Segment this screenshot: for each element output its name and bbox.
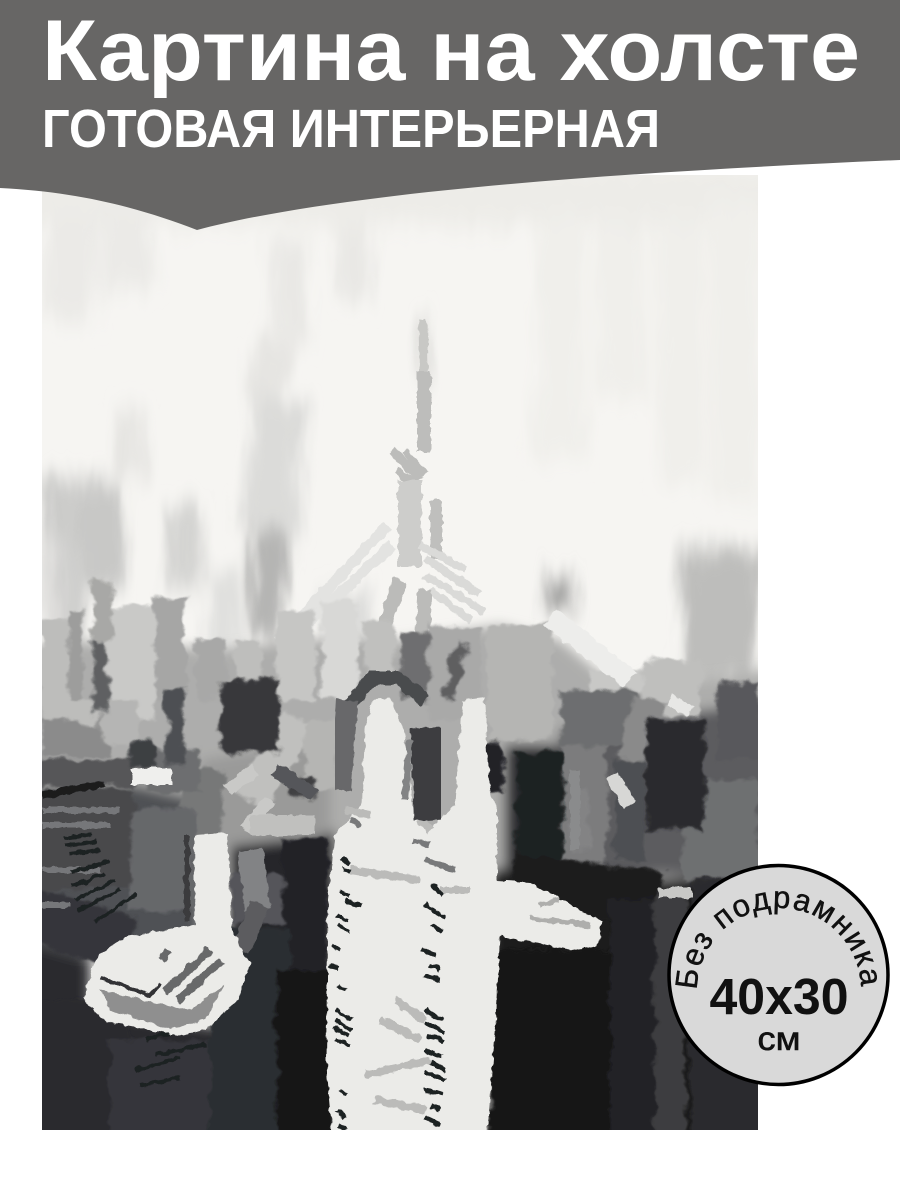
painting: hazy sky streaks: [20, 195, 780, 700]
header banner: [0, 0, 900, 230]
badge circle: [669, 866, 888, 1084]
painting: mid-tone strokes over the dark masses: [42, 617, 692, 950]
badge size: 40x30: [710, 968, 848, 1025]
painting: abstract city skyline with skyscraper: [20, 175, 780, 1160]
badge curved text: Без подрамника: [675, 891, 877, 988]
painting: light foreground building with glass top: [84, 833, 250, 1035]
painting: striped dark shadows on the left buildings: [64, 834, 205, 1085]
painting: spire brush strokes: [278, 320, 485, 642]
painting: tower crown and flanking dark strokes: [340, 678, 436, 820]
title: Картина на холсте: [42, 3, 860, 99]
painting: dark building masses: [30, 640, 730, 1160]
painting: underpainting masses: [42, 619, 758, 1130]
painting: central white skyscraper: [326, 697, 602, 1150]
painting: window strokes on the skyscraper: [330, 820, 455, 1130]
painting: midground city blocks: [30, 580, 738, 880]
badge unit: см: [758, 1020, 800, 1057]
size badge: [667, 864, 890, 1086]
subtitle: ГОТОВАЯ ИНТЕРЬЕРНАЯ: [42, 99, 660, 159]
